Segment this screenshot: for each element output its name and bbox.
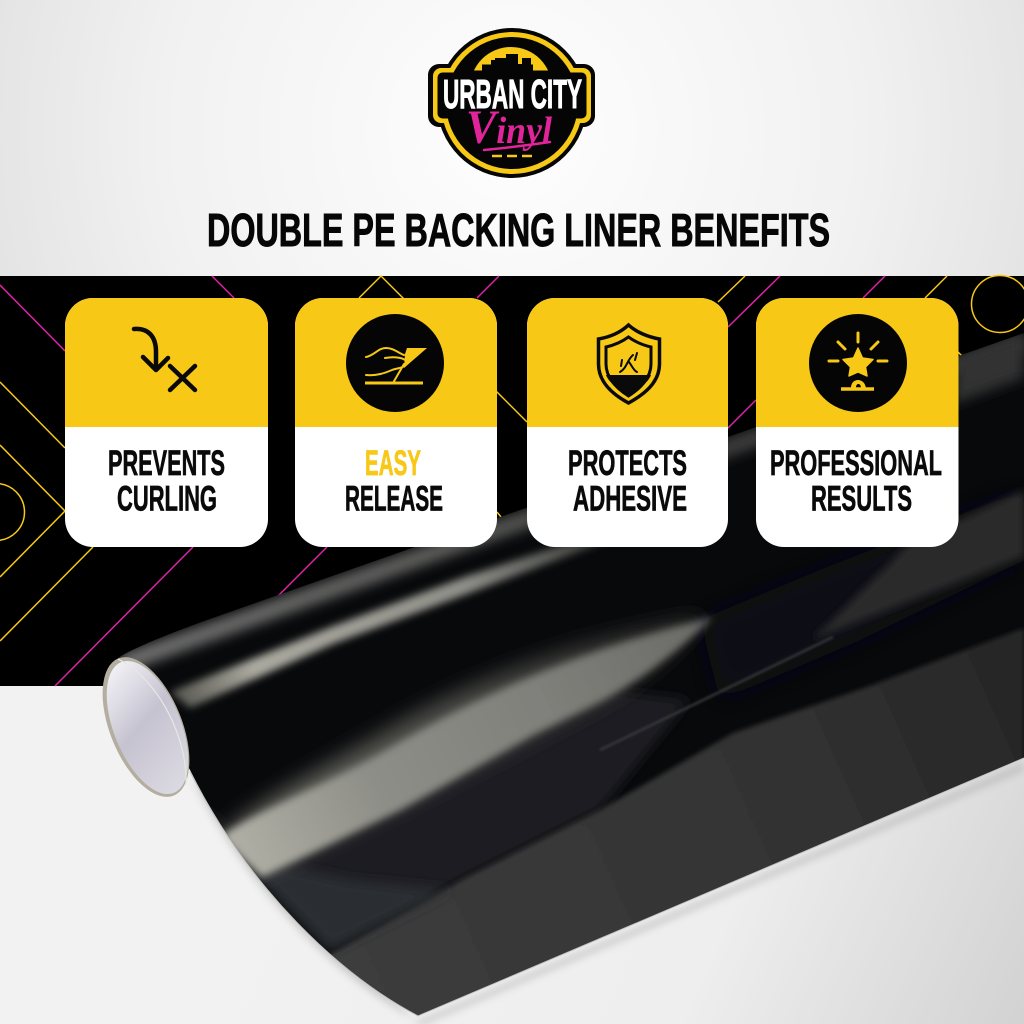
logo skyline — [474, 47, 548, 70]
card body — [527, 298, 728, 547]
card: professional results — [756, 298, 958, 547]
icon: hand peeling liner — [346, 314, 444, 412]
card: easy release — [295, 298, 497, 547]
roll end opening — [85, 645, 207, 809]
roll body — [118, 333, 1024, 1016]
card text: RELEASE — [345, 480, 443, 518]
black pattern band — [0, 276, 1024, 686]
logo badge — [428, 28, 595, 178]
card text: ADHESIVE — [573, 480, 687, 518]
card text: PROTECTS — [568, 444, 687, 483]
icon: curl arrow with cross — [134, 329, 195, 390]
card: prevents curling — [65, 298, 268, 547]
card text — [108, 444, 225, 518]
roll sheet edge highlight — [190, 758, 1024, 1016]
card text — [770, 444, 942, 518]
card text: CURLING — [117, 480, 217, 518]
card body — [295, 298, 497, 547]
background: upper — [0, 0, 1024, 276]
logo underline — [484, 142, 550, 150]
logo wordmark: Urban City: URBAN CITY — [443, 71, 582, 117]
card body — [65, 298, 268, 547]
card text: RESULTS — [811, 480, 912, 518]
card: protects adhesive — [527, 298, 728, 547]
icon: star with rays — [809, 314, 907, 412]
roll reflections — [118, 333, 1024, 1024]
card text — [568, 444, 687, 518]
logo script: Vinyl: Vinyl — [466, 101, 552, 154]
card text — [345, 444, 443, 518]
icon: shield — [598, 325, 660, 403]
card body — [756, 298, 958, 547]
logo dashes — [492, 155, 532, 157]
vinyl roll — [85, 333, 1024, 1024]
card text: EASY — [365, 444, 421, 483]
roll shadow — [190, 763, 1024, 1024]
logo: Urban City Vinyl — [428, 28, 595, 178]
card text: PREVENTS — [108, 444, 225, 483]
background: lower — [0, 686, 1024, 1024]
